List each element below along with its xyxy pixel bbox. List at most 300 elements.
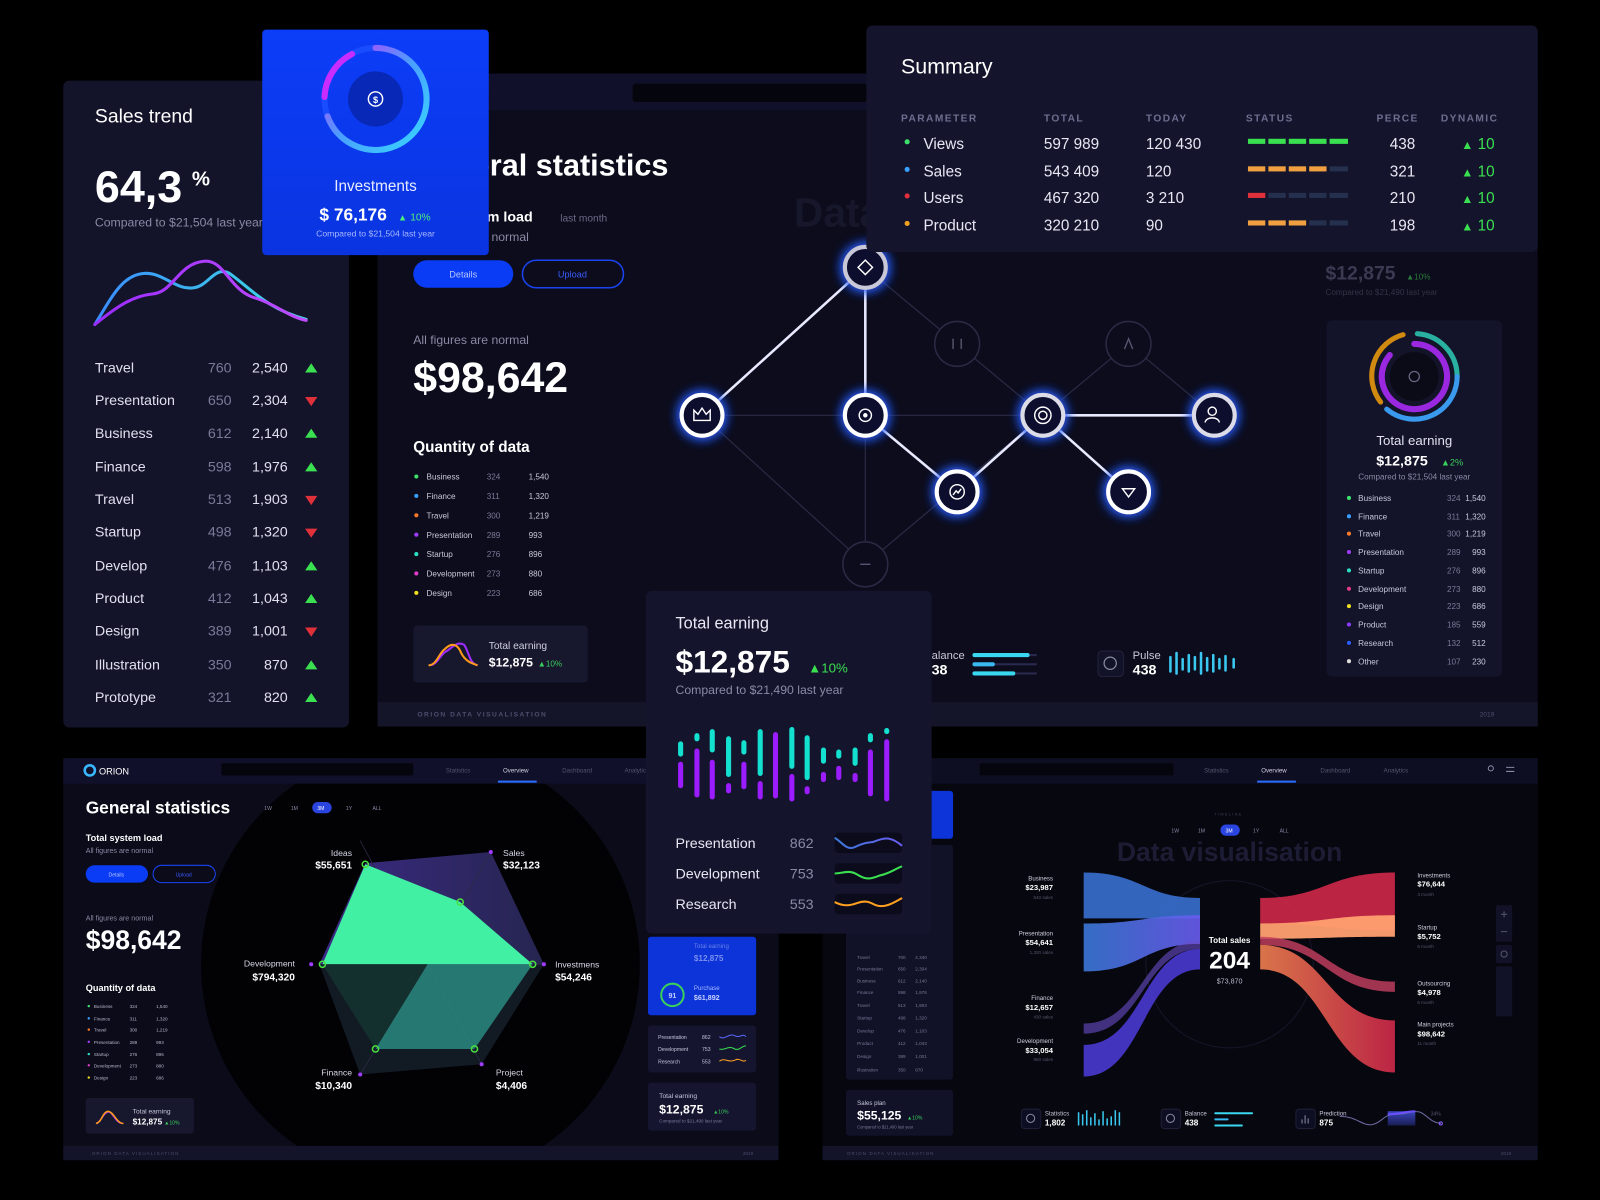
panel: general statistics (back)	[378, 73, 1538, 727]
list: sales trend rows: 513	[208, 492, 232, 508]
list: sales trend rows: 498	[208, 525, 232, 541]
table rows: 90	[1146, 218, 1163, 235]
kpi: 98,642	[413, 333, 568, 402]
right column cards: $12,875	[659, 1102, 704, 1116]
list: quantity small: Business	[94, 1004, 113, 1009]
list: sales trend rows: 2,540	[252, 360, 288, 376]
card: investments: Investments	[334, 178, 417, 195]
right column cards: Total earning	[659, 1093, 697, 1100]
chart: bars	[681, 730, 887, 799]
text block: system load small: All figures are normal	[86, 914, 153, 922]
widgets: statistics balance prediction: 34%	[1431, 1111, 1441, 1117]
list: quantity of data: 1,320	[529, 492, 549, 501]
list: quantity small: 1,540	[156, 1004, 168, 1009]
card: total earning ring: Development	[1358, 585, 1407, 594]
right column cards: Presentation	[658, 1035, 687, 1041]
sparklines	[835, 833, 902, 914]
sankey labels: $98,642	[1417, 1030, 1445, 1039]
footer	[378, 702, 1538, 727]
card: total earning ring	[1327, 320, 1502, 677]
card: total earning mini: Total earning	[489, 641, 547, 652]
timeline pills	[264, 802, 382, 813]
left column cards: 650	[898, 966, 906, 971]
widgets: statistics balance prediction: Balance	[1185, 1110, 1207, 1117]
radar labels: Development	[244, 958, 295, 968]
sankey labels: Development	[1017, 1038, 1053, 1045]
sankey labels: Finance	[1031, 995, 1054, 1002]
card: total earning ring: 300	[1447, 530, 1461, 539]
card: total earning ring: 107	[1447, 657, 1461, 666]
radar labels: Sales	[503, 848, 525, 858]
card: investments: $ 76,176	[319, 204, 387, 224]
table rows: ▲ 10	[1461, 164, 1495, 181]
right column cards: Compared to $21,490 last year	[659, 1118, 723, 1123]
widget: balance: alance	[932, 650, 965, 662]
left column cards: Presentation	[857, 966, 883, 971]
card: total earning popup: $12,875	[676, 643, 790, 679]
radar labels: $55,651	[315, 860, 352, 871]
panel: summary	[866, 26, 1538, 252]
list: sales trend rows: 2,140	[252, 426, 288, 442]
left column cards: Finance	[857, 990, 874, 995]
table rows: 3 210	[1146, 190, 1184, 207]
left column cards: 1,043	[915, 1041, 927, 1046]
list: sales trend rows: 650	[208, 393, 232, 409]
text block: system load small: Details	[109, 873, 125, 879]
left column cards: Compared to $21,490 last year	[857, 1125, 914, 1130]
list: quantity of data: 273	[487, 570, 501, 579]
card: total earning ring: 311	[1447, 512, 1460, 521]
card: total earning ring: 223	[1447, 602, 1461, 611]
footer small: ORION DATA VISUALISATION	[92, 1151, 179, 1156]
sankey labels: $54,641	[1025, 938, 1054, 947]
card: total earning ring: Research	[1358, 639, 1393, 648]
radar labels: $32,123	[503, 860, 540, 871]
sankey labels: 6 month	[1417, 1000, 1434, 1005]
sankey labels: Investments	[1417, 873, 1450, 880]
sankey labels: $12,657	[1025, 1003, 1053, 1012]
nav: orion: Statistics	[446, 767, 470, 774]
radar labels: $4,406	[496, 1081, 527, 1092]
sankey labels: 860 sales	[1033, 1057, 1054, 1062]
kpi: 98,642: $98,642	[413, 354, 568, 402]
text block: system load small: Upload	[176, 873, 192, 879]
card: total earning popup: ▲10%	[808, 660, 848, 675]
kpi: 64,3%: 64,3	[95, 161, 182, 212]
card: total earning ring: Compared to $21,504 last year	[1358, 473, 1471, 482]
list: sales trend rows: 412	[208, 591, 232, 607]
list: sales trend rows: 1,320	[252, 525, 288, 541]
watermark: data visualisation: Data visualisation	[1117, 837, 1342, 867]
table rows: 120 430	[1146, 136, 1201, 153]
left column cards: 598	[898, 990, 906, 995]
card: investments: 10%	[410, 212, 431, 223]
card: total earning ring: Business	[1358, 494, 1391, 503]
left column cards: Develop	[857, 1029, 874, 1034]
left column cards	[846, 791, 953, 1136]
list: quantity small: 324	[130, 1004, 138, 1009]
list: quantity of data	[413, 439, 549, 598]
card: total earning ring: 686	[1472, 602, 1486, 611]
list: sales trend rows	[95, 360, 317, 706]
timeline pills: 1M	[1198, 829, 1205, 835]
card: total earning ring: Finance	[1358, 512, 1388, 521]
list: sales trend rows: Illustration	[95, 657, 160, 673]
card: investments: ▲	[398, 212, 407, 222]
sankey labels: 6 month	[1417, 944, 1434, 949]
timeline pills: 1Y	[1253, 829, 1260, 835]
card: total earning ring: 324	[1447, 494, 1461, 503]
card: investments: Compared to $21,504 last year	[316, 229, 435, 239]
table rows: Product	[923, 218, 977, 235]
card: total earning ring: 276	[1447, 566, 1461, 575]
table rows: 120	[1146, 164, 1171, 181]
left column cards: 476	[898, 1029, 906, 1034]
card: total earning popup: Compared to $21,490 last year	[676, 683, 843, 697]
list: sales trend rows: 476	[208, 558, 232, 574]
panel: bottom-right data visualisation sankey	[822, 758, 1538, 1160]
buttons: details upload: Upload	[558, 270, 587, 280]
left column cards: 513	[898, 1003, 906, 1008]
list: sales trend rows: Develop	[95, 558, 147, 574]
text block: system load: All figures are normal	[413, 230, 529, 244]
kpi: faint 12,875: Compared to $21,490 last year	[1326, 288, 1438, 297]
nav: Overview	[1261, 767, 1287, 774]
right column cards: 91	[668, 992, 676, 1000]
chart: sankey: $73,870	[1217, 978, 1243, 986]
panel: sales trend: Sales trend	[95, 105, 193, 127]
list: quantity of data: 896	[529, 550, 543, 559]
list: sales trend rows: 321	[208, 690, 232, 706]
right column cards	[648, 937, 756, 1131]
chart: sales trend wave	[95, 261, 306, 324]
timeline pills: 1M	[291, 806, 298, 812]
widget: balance	[932, 650, 1037, 678]
list: quantity small: Startup	[94, 1052, 109, 1057]
list: sales trend rows: 598	[208, 459, 232, 475]
sankey labels: Startup	[1417, 925, 1438, 932]
widgets: statistics balance prediction: 438	[1185, 1119, 1199, 1128]
sankey labels: Business	[1028, 876, 1053, 883]
card: total earning ring: Travel	[1358, 530, 1381, 539]
left column cards: 389	[898, 1054, 906, 1059]
list: quantity small: Development	[94, 1063, 122, 1068]
table rows: ▲ 10	[1461, 136, 1495, 153]
list: quantity small: 993	[156, 1040, 164, 1045]
timeline pills: ALL	[372, 806, 382, 812]
list: quantity small: 311	[130, 1016, 137, 1021]
left column cards: Travel	[857, 1003, 870, 1008]
left column cards: 498	[898, 1015, 906, 1020]
list: quantity of data: 324	[487, 473, 501, 482]
nav: orion: Dashboard	[562, 767, 592, 774]
list: quantity small: Finance	[94, 1016, 111, 1021]
text block: system load small	[86, 833, 215, 955]
kpi: 64,3%: Compared to $21,504 last year	[95, 216, 263, 230]
card: investments	[262, 30, 489, 255]
table header: PARAMETER	[901, 113, 978, 124]
left column cards: 1,320	[915, 1015, 927, 1020]
sankey labels: $33,054	[1025, 1046, 1054, 1055]
footer: ORION DATA VISUALISATION	[847, 1151, 935, 1156]
card: total earning small	[86, 1098, 194, 1134]
table header: TODAY	[1146, 113, 1188, 124]
card: total earning ring: 993	[1472, 548, 1486, 557]
card: total earning ring: 273	[1447, 585, 1461, 594]
card: total earning ring: $12,875	[1376, 453, 1428, 469]
list: quantity small: 880	[156, 1063, 164, 1068]
left column cards: $55,125	[857, 1108, 902, 1122]
table rows: 438	[1390, 136, 1415, 153]
left column cards: 1,001	[915, 1054, 927, 1059]
table rows: 321	[1390, 164, 1415, 181]
list: sales trend rows: Prototype	[95, 690, 156, 706]
list: sales trend rows: 870	[264, 657, 288, 673]
watermark: data: Data visualisation	[794, 190, 1141, 236]
left column cards: 870	[915, 1067, 923, 1072]
chart: sankey: Total sales	[1209, 936, 1251, 945]
table rows: ▲ 10	[1461, 218, 1495, 235]
list: quantity small: 1,320	[156, 1016, 168, 1021]
list: popup rows: Research	[676, 897, 737, 913]
left column cards: 1,103	[915, 1029, 927, 1034]
list: quantity of data: Quantity of data	[413, 439, 530, 456]
nav: orion: Analytics	[624, 767, 649, 774]
text block: system load small: $98,642	[86, 925, 182, 955]
table rows: ▲ 10	[1461, 190, 1495, 207]
list: quantity of data: Business	[427, 473, 460, 482]
list: popup rows: 553	[790, 897, 814, 913]
timeline pills: 1Y	[346, 806, 353, 812]
widget: pulse	[1098, 650, 1234, 678]
list: quantity small: 896	[156, 1052, 164, 1057]
kpi: faint 12,875: ▲10%	[1406, 273, 1431, 282]
radar labels: Ideas	[331, 848, 353, 858]
nav	[980, 763, 1514, 783]
left column cards: Design	[857, 1054, 872, 1059]
list: quantity of data: Travel	[427, 511, 449, 520]
left column cards: 1,903	[915, 1003, 927, 1008]
timeline pills: 1W	[1171, 829, 1179, 835]
list: sales trend rows: Travel	[95, 492, 134, 508]
text block: system load small: Total system load	[86, 833, 163, 843]
list: quantity small	[86, 983, 168, 1081]
table rows: 597 989	[1044, 136, 1099, 153]
nav: Dashboard	[1320, 767, 1350, 774]
left column cards: Startup	[857, 1015, 872, 1020]
chart: sankey: 204	[1209, 947, 1250, 974]
text block: system load: last month	[560, 213, 607, 224]
table rows: Views	[923, 136, 964, 153]
card: total earning ring: ▲2%	[1441, 457, 1463, 467]
left column cards: 2,140	[915, 979, 927, 984]
list: popup rows: 862	[790, 836, 814, 852]
nav: orion: ORION	[99, 766, 129, 776]
table rows: 543 409	[1044, 164, 1099, 181]
list: sales trend rows: 820	[264, 690, 288, 706]
card: total earning small: $12,875	[133, 1117, 163, 1126]
table rows: 320 210	[1044, 218, 1099, 235]
left column cards: 1,976	[915, 990, 927, 995]
widgets: statistics balance prediction: Prediction	[1319, 1110, 1347, 1117]
radar labels: Finance	[321, 1068, 352, 1078]
card: total earning ring: Product	[1358, 621, 1387, 630]
list: sales trend rows: 760	[208, 360, 232, 376]
right column cards: $61,892	[694, 994, 720, 1002]
kpi: faint 12,875: $12,875	[1326, 263, 1396, 285]
list: popup rows: Development	[676, 867, 760, 883]
list: quantity of data: Startup	[427, 550, 453, 559]
network graph	[682, 247, 1235, 587]
left column cards: 2,304	[915, 966, 927, 971]
radar labels: Project	[496, 1068, 523, 1078]
toolbar	[1496, 905, 1512, 1016]
card: total earning ring: 512	[1472, 639, 1486, 648]
card: total earning ring: 289	[1447, 548, 1461, 557]
text block: system load	[413, 209, 607, 244]
list: sales trend rows: Business	[95, 426, 153, 442]
card: investments: $	[373, 95, 378, 105]
table rows: Sales	[923, 164, 962, 181]
card: total earning ring: 1,219	[1465, 530, 1486, 539]
table header: TOTAL	[1044, 113, 1084, 124]
list: quantity small: Travel	[94, 1028, 106, 1033]
timeline pills: TIMELINE	[1214, 812, 1243, 816]
sankey labels: Main projects	[1417, 1022, 1454, 1029]
sankey labels: $76,644	[1417, 880, 1446, 889]
table rows: 210	[1390, 190, 1415, 207]
footer: 2019	[1480, 711, 1495, 718]
card: total earning ring: 185	[1447, 621, 1461, 630]
list: quantity of data: Presentation	[427, 531, 472, 540]
table rows: 467 320	[1044, 190, 1099, 207]
list: sales trend rows: Product	[95, 591, 144, 607]
list: quantity of data: 289	[487, 531, 501, 540]
widgets: statistics balance prediction: Statistics	[1045, 1110, 1069, 1117]
text block: system load small: All figures are normal	[86, 847, 153, 855]
left column cards: 350	[898, 1067, 906, 1072]
card: total earning popup: Total earning	[676, 615, 769, 633]
list: quantity of data: 1,219	[529, 511, 549, 520]
card: total earning small: Total earning	[133, 1108, 171, 1115]
list: quantity of data: Design	[427, 589, 452, 598]
radar labels: Investmens	[555, 959, 600, 969]
table header	[901, 113, 1498, 124]
list: sales trend rows: 1,001	[252, 624, 288, 640]
widget: pulse: Pulse	[1133, 650, 1161, 662]
timeline pills: ALL	[1280, 829, 1289, 835]
list: quantity of data: 223	[487, 589, 501, 598]
list: sales trend rows: 350	[208, 657, 232, 673]
list: quantity of data: Development	[427, 570, 475, 579]
right column cards: Total earning	[694, 943, 729, 950]
list: sales trend rows: 1,043	[252, 591, 288, 607]
left column cards: 612	[898, 979, 906, 984]
right column cards: 553	[702, 1059, 711, 1065]
table rows: 198	[1390, 218, 1415, 235]
left column cards: Illustration	[857, 1067, 878, 1072]
left column cards: Business	[857, 979, 876, 984]
card: total earning ring: 132	[1447, 639, 1461, 648]
right column cards: ▲10%	[713, 1109, 729, 1115]
widgets: statistics balance prediction: 875	[1319, 1119, 1333, 1128]
card: total earning mini: $12,875	[489, 655, 533, 669]
list: quantity of data: 1,540	[529, 473, 549, 482]
list: quantity small: 289	[130, 1040, 138, 1045]
sankey labels: $5,752	[1417, 932, 1441, 941]
card: total earning ring: Startup	[1358, 566, 1385, 575]
table header: STATUS	[1246, 113, 1294, 124]
list: quantity of data: 311	[487, 492, 500, 501]
sankey labels: $23,987	[1025, 883, 1053, 892]
list: quantity small: 276	[130, 1052, 138, 1057]
widgets: statistics balance prediction	[1021, 1109, 1442, 1129]
sankey labels: 11 month	[1417, 1041, 1437, 1046]
sankey labels: Outsourcing	[1417, 981, 1450, 988]
kpi: 98,642: All figures are normal	[413, 333, 529, 347]
left column cards: Travel	[857, 955, 870, 960]
list: popup rows: 753	[790, 867, 814, 883]
footer: 2019	[1501, 1151, 1512, 1156]
nav: orion	[85, 763, 649, 783]
list: quantity small: 686	[156, 1076, 164, 1081]
footer: ORION DATA VISUALISATION	[417, 711, 547, 718]
list: popup rows: Presentation	[676, 836, 756, 852]
list: sales trend rows: 2,304	[252, 393, 288, 409]
list: popup rows	[676, 836, 814, 913]
list: quantity of data: 993	[529, 531, 543, 540]
radar labels	[244, 848, 600, 1092]
card: total earning ring: 896	[1472, 566, 1486, 575]
list: quantity small: Quantity of data	[86, 983, 156, 993]
chart: radar	[309, 841, 546, 1077]
sankey labels: $4,978	[1417, 988, 1441, 997]
list: sales trend rows: Finance	[95, 459, 146, 475]
card: total earning mini: ▲10%	[538, 659, 562, 668]
right column cards: Development	[658, 1047, 689, 1053]
list: quantity small: 1,219	[156, 1028, 168, 1033]
list: sales trend rows: Startup	[95, 525, 141, 541]
left column cards: 700	[898, 955, 906, 960]
nav: orion: Overview	[503, 767, 529, 774]
nav: Statistics	[1204, 767, 1229, 774]
nav: Analytics	[1384, 767, 1408, 774]
footer small: 2019	[743, 1151, 753, 1156]
timeline pills	[1171, 812, 1289, 836]
timeline pills: 1W	[264, 806, 272, 812]
left column cards: ▲10%	[907, 1115, 923, 1121]
left column cards: 412	[898, 1041, 906, 1046]
sankey labels: 430 sales	[1033, 1014, 1054, 1019]
list: quantity small: 300	[130, 1028, 138, 1033]
right column cards: 862	[702, 1035, 711, 1041]
timeline pills: 3M	[317, 806, 324, 812]
list: quantity small: 273	[130, 1063, 138, 1068]
table rows: Users	[923, 190, 964, 207]
footer	[822, 1146, 1538, 1160]
card: total earning ring: 880	[1472, 585, 1486, 594]
widget: balance: 38	[932, 662, 948, 678]
list: sales trend rows: 612	[208, 426, 232, 442]
card: total earning ring: 1,320	[1465, 512, 1486, 521]
card: total earning ring: 230	[1472, 657, 1486, 666]
list: sales trend rows: Design	[95, 624, 139, 640]
list: quantity of data: 880	[529, 570, 543, 579]
card: total earning ring: Presentation	[1358, 548, 1404, 557]
sankey labels: Presentation	[1019, 931, 1053, 938]
buttons: details upload	[413, 260, 623, 288]
table header: PERCE	[1377, 113, 1419, 124]
